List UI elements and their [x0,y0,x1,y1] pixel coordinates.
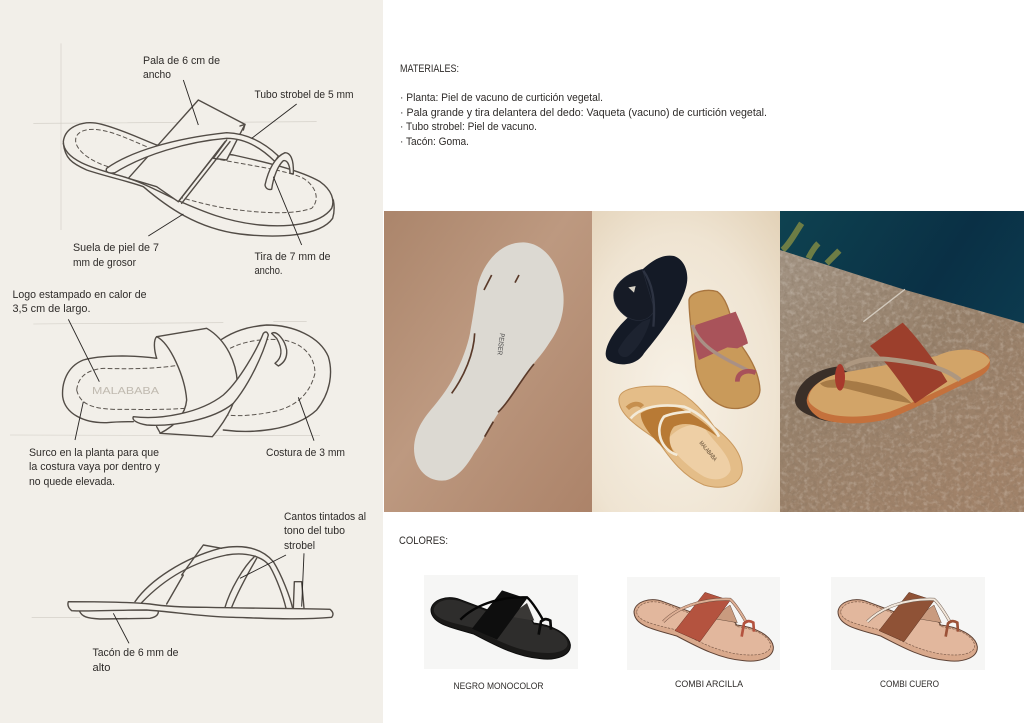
shadow [795,366,848,422]
caption: combi arcilla: COMBI ARCILLA [675,679,744,690]
photo: insole on brown paper: PEISER [495,333,505,355]
label: logo [12,289,146,315]
label: tubo strobel: Tubo strobel de 5 mm [254,89,354,101]
photo: clay sandal on stone by the sea [780,211,1024,514]
label: logo: Logo estampado en calor de [12,289,146,301]
stamped logo on caramel sandal: MALABABA [697,440,717,463]
label: cantos [284,511,366,552]
label: costura: Costura de 3 mm [266,447,345,459]
caption: combi cuero: COMBI CUERO [880,679,939,690]
sketch: three-quarter view of sandal [33,43,334,245]
label: pala [143,55,220,81]
label: suela: mm de grosor [73,257,136,269]
materials list: · Pala grande y tira delantera del dedo: Vaqueta (vacuno) de curtición vegetal. [400,107,767,119]
strap [870,323,947,403]
label: pala: ancho [143,69,171,81]
label: tira: Tira de 7 mm de [254,251,330,263]
label: tacón: alto [92,662,110,674]
label: surco: la costura vaya por dentro y [29,461,160,473]
black sandal [606,256,687,364]
label: cantos: strobel [284,540,315,552]
materials list: · Tacón: Goma. [400,136,469,148]
plants [783,223,839,263]
label: logo: 3,5 cm de largo. [12,303,90,315]
photo: three sandals on cream [592,211,780,512]
label: pala: Pala de 6 cm de [143,55,220,67]
colour option: black [424,575,578,669]
red and tan sandal [689,290,760,409]
materials list [400,92,767,148]
caramel and cream sandal [619,386,742,487]
label: tacón [92,647,178,674]
colour option: arcilla [627,577,780,670]
label: tira [254,251,330,277]
label: cantos: tono del tubo [284,525,345,537]
colour option: cuero [831,577,985,670]
label: suela: Suela de piel de 7 [73,242,159,254]
sketch: side view of sandal [32,545,333,643]
label: surco: no quede elevada. [29,476,115,488]
photo: insole on brown paper [384,211,592,512]
sketch: top view of sandal [10,319,331,441]
sole [807,350,990,423]
stone ledge [780,250,1024,514]
label: suela [73,242,159,269]
left panel: technical sketches [0,0,383,723]
materials list: · Tubo strobel: Piel de vacuno. [400,121,537,133]
heading: materiales: MATERIALES: [400,63,459,75]
label: tira: ancho. [254,265,282,277]
label: tacón: Tacón de 6 mm de [92,647,178,659]
stamped logo on insole: MALABABA [92,385,159,397]
materials list: · Planta: Piel de vacuno de curtición vegetal. [400,92,603,104]
label: surco: Surco en la planta para que [29,447,159,459]
label: surco [29,447,160,488]
caption: negro monocolor: NEGRO MONOCOLOR [454,681,544,692]
label: cantos: Cantos tintados al [284,511,366,523]
heading: colores: COLORES: [399,535,448,547]
